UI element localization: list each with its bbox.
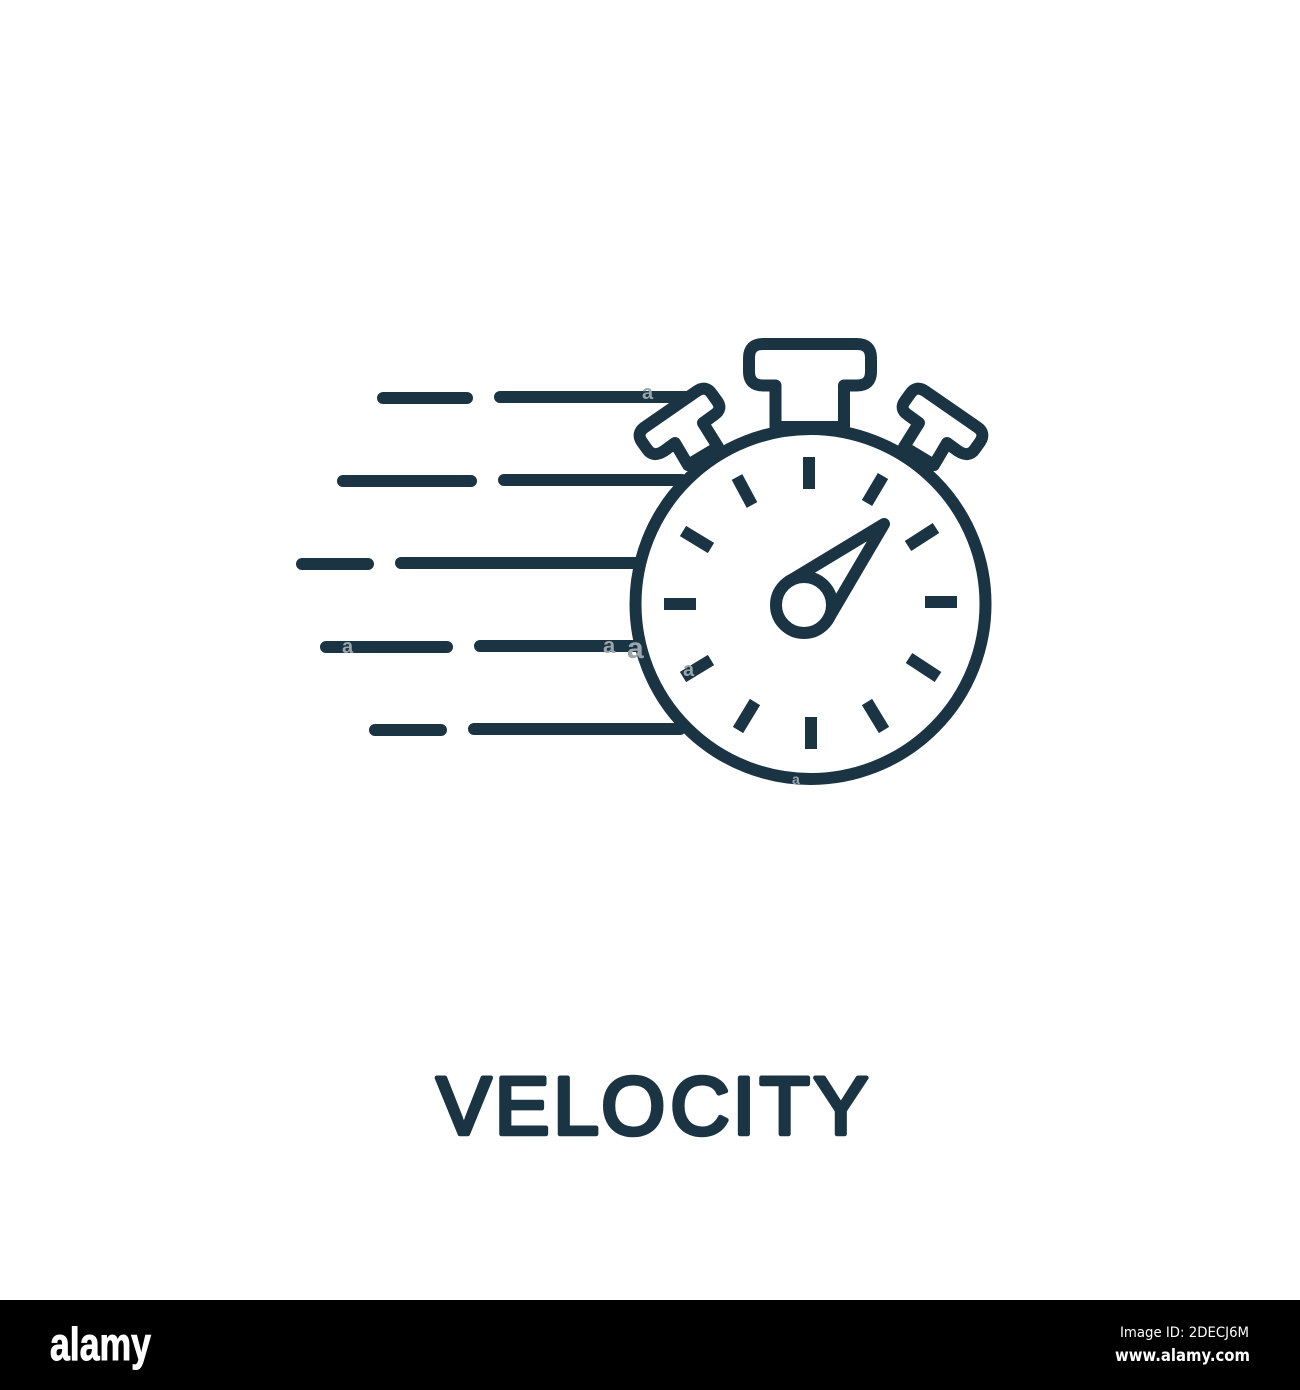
footer logo: alamy (50, 1318, 151, 1370)
left button (640, 389, 719, 465)
stopwatch body (636, 429, 986, 779)
top button (749, 344, 871, 427)
watermark marks: a (642, 382, 654, 404)
watermark marks: a (683, 659, 695, 681)
watermark marks: a (603, 633, 616, 658)
footer bar (0, 1300, 1300, 1390)
right button (903, 389, 982, 465)
icon: stopwatch with speed lines (302, 344, 986, 779)
needle (776, 524, 884, 633)
title: VELOCITY (436, 1061, 868, 1152)
footer url: www.alamy.com (1115, 1346, 1250, 1366)
watermark marks (342, 382, 800, 787)
dial tick marks (664, 457, 957, 749)
watermark marks: a (342, 636, 354, 658)
image id: Image ID: 2DECJ6M (1120, 1325, 1249, 1341)
watermark marks: a (792, 771, 800, 787)
watermark marks: a (627, 632, 644, 665)
speed lines (302, 397, 692, 730)
